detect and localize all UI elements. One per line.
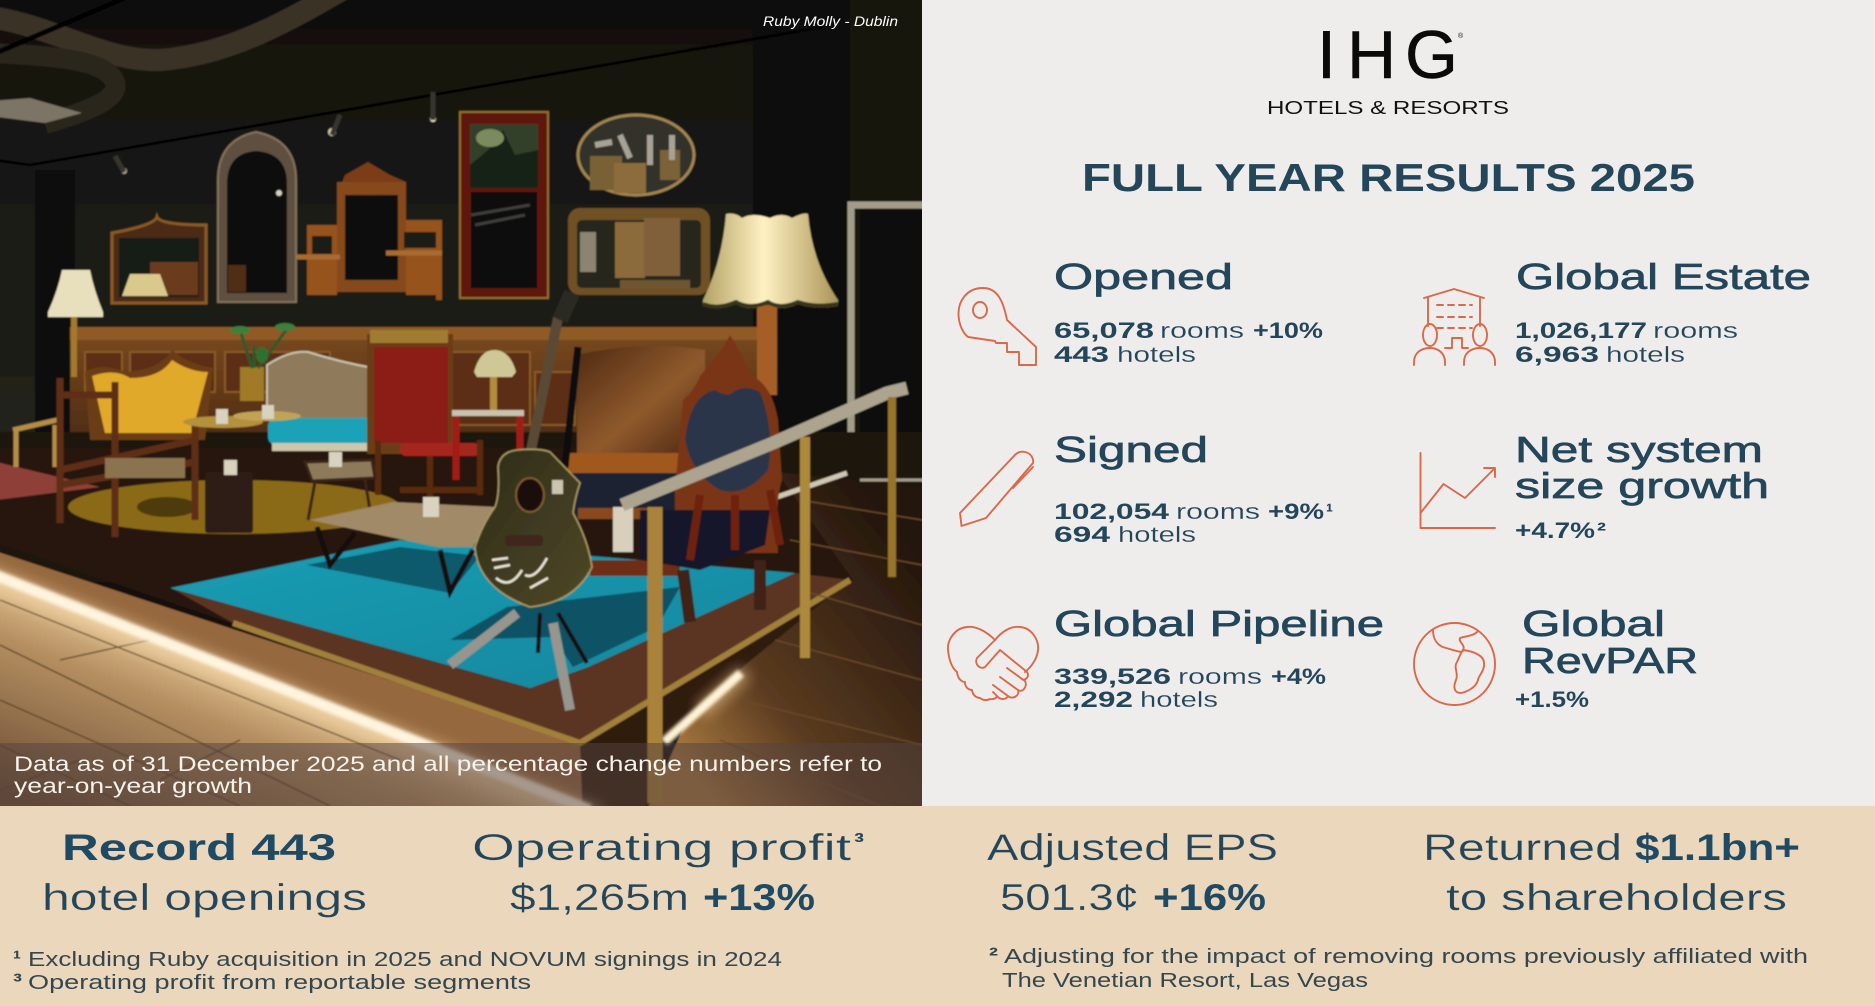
teal rug [170,540,795,688]
logo: IHG Hotels & Resorts [1267,17,1509,118]
stair handrail and brass posts [622,388,907,803]
panel: right results background [922,0,1875,807]
highlight: record openings: hotel openings [42,877,367,918]
stat: Net system size growth: ² [1597,518,1606,543]
mirror: wooden dresser [297,162,442,300]
highlight: record openings [42,827,367,918]
plant in vase [230,323,295,401]
stat: Opened [958,256,1323,367]
mirror: gold with shelves [568,208,710,295]
icon: growth chart [1420,453,1495,528]
stat: Signed [960,429,1333,547]
stat: Global Estate: 6,963 [1515,342,1599,367]
logo: IHG Hotels & Resorts: IHG [1317,17,1458,93]
stat: Opened: Opened [1054,256,1233,297]
panel: hotel lobby photo [0,0,942,826]
yellow sofa [85,350,213,440]
rough wooden table [310,497,497,592]
leather sofa [568,346,705,576]
highlight: returned to shareholders: to shareholders [1446,877,1787,918]
stat: Net system size growth [1420,429,1769,543]
icon: pen [960,452,1033,526]
footnotes left: ¹ [13,946,21,971]
footnotes left [13,946,782,994]
stat: Global Pipeline: 2,292 [1054,687,1133,712]
icon: key [958,288,1036,365]
highlight: operating profit: +13% [703,877,815,918]
highlight: operating profit: Operating profit [472,827,852,868]
floor lamp small [48,270,103,377]
mirror: tall red frame with painting [460,112,548,298]
footnotes left: ³ [13,969,22,994]
stat: Signed: 694 [1054,522,1111,547]
tiffany table lamp and red side table [452,350,524,480]
icon: handshake heart [948,627,1038,700]
stat: Global Estate: rooms [1653,318,1738,343]
stat: Net system size growth: +4.7% [1515,518,1595,543]
highlight: returned to shareholders: Returned [1423,827,1622,868]
highlight: adjusted EPS: +16% [1153,877,1266,918]
stat: Net system size growth: Net system [1515,429,1763,470]
stat: Opened: 443 [1054,342,1109,367]
stat: Signed: +9% [1268,499,1324,524]
footnote right: Adjusting for the impact of removing rooms previously affiliated with [1004,946,1808,968]
stat: Global Pipeline: Global Pipeline [1054,603,1384,644]
logo: IHG Hotels & Resorts: HOTELS & RESORTS [1267,97,1509,118]
highlight: operating profit: ³ [854,829,864,856]
stat: Signed: Signed [1054,429,1208,470]
floor lamp large [703,214,838,395]
stat: Signed: rooms [1176,499,1260,524]
photo credit: Ruby Molly - Dublin [763,13,898,29]
stat: Global Pipeline [948,603,1384,712]
photo caption: Data as of 31 December 2025 and all percentage change numbers refer to [14,753,882,776]
highlight: adjusted EPS [987,827,1278,918]
highlight: returned to shareholders [1423,827,1800,918]
highlight: adjusted EPS: Adjusted EPS [987,827,1278,868]
stat: Global RevPAR: RevPAR [1522,640,1698,681]
navy high-back chair [640,335,782,622]
stat: Net system size growth: size growth [1515,465,1769,506]
stat: Global RevPAR: Global [1522,603,1665,644]
mirror: arched silver [218,132,296,302]
rattan sofa and teal bench [267,352,375,451]
stat: Global Pipeline: hotels [1140,687,1218,712]
footnote right: ² [989,943,998,968]
mirror: gilded landscape [112,217,206,303]
stat: Opened: rooms [1160,318,1244,343]
acoustic guitar on stand [450,293,592,710]
mirror: round [578,115,694,195]
icon: hotel with people [1414,289,1495,365]
red chair [367,330,480,500]
stat: Opened: hotels [1117,342,1196,367]
icon: globe [1414,623,1495,705]
highlight: returned to shareholders: $1.1bn+ [1635,827,1800,868]
footnotes left: Operating profit from reportable segments [28,972,531,994]
title: FULL YEAR RESULTS 2025 [1082,157,1695,200]
stat: Opened: 65,078 [1054,318,1154,343]
stat: Global Pipeline: rooms [1178,664,1262,689]
footnotes left: Excluding Ruby acquisition in 2025 and NOVUM signings in 2024 [28,949,782,971]
logo: IHG Hotels & Resorts: ® [1458,32,1464,40]
highlight: operating profit: $1,265m [510,877,689,918]
panel: highlights band [0,806,1875,1006]
highlight: adjusted EPS: 501.3¢ [1000,877,1139,918]
round yellow rug [68,480,400,534]
stat: Global Estate: hotels [1606,342,1685,367]
highlight: operating profit [472,827,864,918]
stat: Global Pipeline: 339,526 [1054,664,1171,689]
stat: Signed: 102,054 [1054,499,1170,524]
highlight: record openings: Record 443 [62,827,336,868]
photo caption [14,753,882,798]
footnote right: The Venetian Resort, Las Vegas [1002,970,1368,992]
platform and floors [0,432,942,826]
wainscot panelling [68,326,758,433]
stat: Global Estate [1414,256,1811,367]
stat: Global Pipeline: +4% [1271,664,1326,689]
stat: Global RevPAR: +1.5% [1515,687,1589,712]
stat: Signed: hotels [1118,522,1196,547]
stat: Global RevPAR [1414,603,1698,712]
stat: Global Estate: 1,026,177 [1515,318,1647,343]
stat: Signed: ¹ [1326,499,1333,524]
caption overlay band [0,743,922,806]
footnote right [989,943,1808,992]
photo caption: year-on-year growth [14,775,252,798]
wooden chair and small tables [13,378,375,537]
stat: Opened: +10% [1253,318,1323,343]
stat: Global Estate: Global Estate [1516,256,1811,297]
